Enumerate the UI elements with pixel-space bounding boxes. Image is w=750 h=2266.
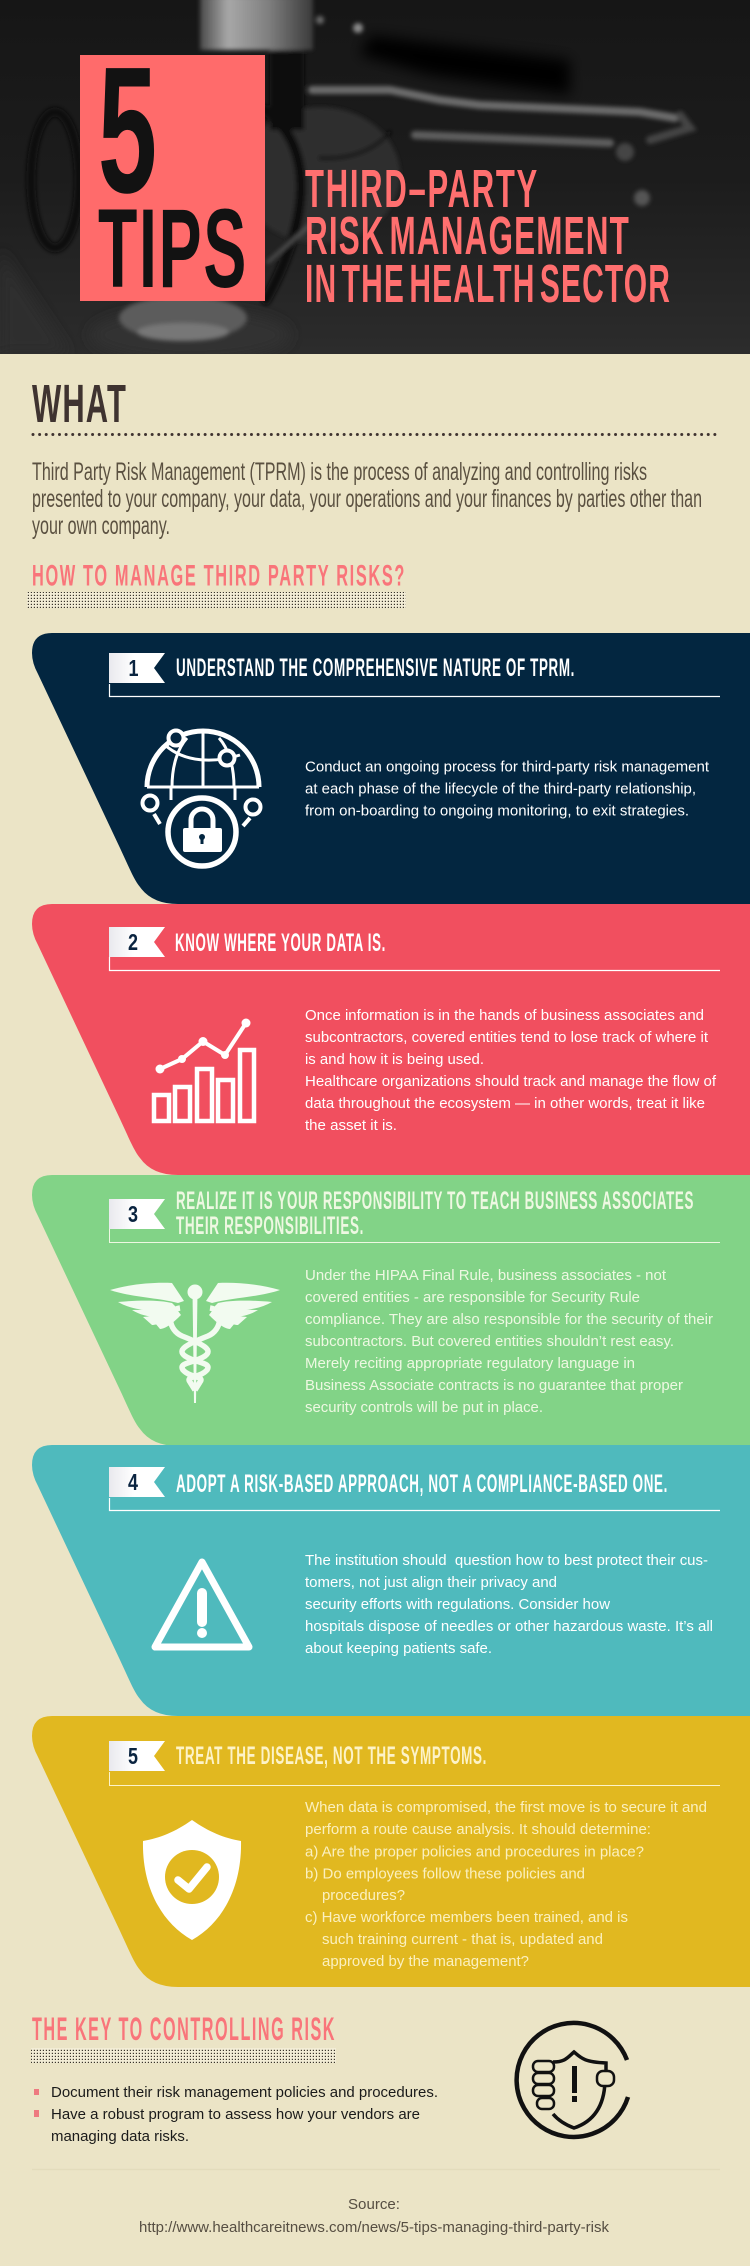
icon: warning triangle [155, 1562, 249, 1647]
panel 2 [32, 904, 750, 1175]
panel 3 body text [305, 1267, 713, 1416]
panel 5 [32, 1716, 750, 1987]
icon: globe with padlock [142, 730, 260, 866]
panel 4 flag [109, 1467, 165, 1497]
panel 5 flag: 5 [128, 1743, 138, 1769]
icon: caduceus [110, 1283, 280, 1403]
key points list: Have a robust program to assess how your vendors are [51, 2106, 420, 2123]
panel 5 body text: such training current - that is, updated and [322, 1931, 603, 1948]
icon: bar chart with trend line [154, 1018, 254, 1121]
panel 3 title [176, 1187, 694, 1240]
panel 2 body text: the asset it is. [305, 1117, 397, 1134]
panel 5 body text: approved by the management? [322, 1953, 529, 1970]
panel 1 flag [109, 653, 165, 683]
panel 3 body text: compliance. They are also responsible for the security of their [305, 1311, 713, 1328]
panel 2 body text: Healthcare organizations should track and manage the flow of [305, 1073, 717, 1090]
panel 4 body text: The institution should question how to best protect their cus- [305, 1552, 708, 1569]
heading: the key to controlling risk [31, 2011, 336, 2063]
panel 2 flag: 2 [128, 929, 138, 955]
panel 5 body text: procedures? [322, 1887, 405, 1904]
heading: how to manage: HOW TO MANAGE THIRD PARTY RISKS? [32, 560, 406, 592]
panel 2 body text: Once information is in the hands of business associates and [305, 1007, 704, 1024]
panel 1 [32, 633, 750, 904]
panel 3 flag: 3 [128, 1201, 138, 1227]
panel 4 [32, 1445, 750, 1716]
panel 4 body text: hospitals dispose of needles or other hazardous waste. It’s all [305, 1618, 713, 1635]
panel 3 flag [109, 1199, 165, 1229]
panel 3 title: THEIR RESPONSIBILITIES. [176, 1212, 364, 1240]
key points list [34, 2084, 438, 2145]
heading: how to manage [27, 560, 406, 608]
hero pink box with 5 TIPS: TIPS [98, 186, 248, 311]
hero pink box with 5 TIPS: 5 [98, 30, 157, 231]
panel 2 body text: is and how it is being used. [305, 1051, 484, 1068]
hero title: THIRD–PARTY [305, 159, 539, 219]
heading: the key to controlling risk: THE KEY TO CONTROLLING RISK [32, 2011, 336, 2047]
source text [139, 2196, 609, 2236]
panel 5 body text: b) Do employees follow these policies and [305, 1866, 585, 1882]
panel 4 body text: tomers, not just align their privacy and [305, 1574, 557, 1591]
dotted divider [33, 433, 716, 436]
panel 2 flag [109, 927, 165, 957]
hero title [305, 159, 671, 314]
hero photo: stethoscope [0, 0, 750, 361]
panel 4 flag: 4 [128, 1469, 138, 1495]
panel 5 body text: When data is compromised, the first move is to secure it and [305, 1799, 707, 1816]
panel 4 body text: about keeping patients safe. [305, 1640, 492, 1657]
intro paragraph [32, 458, 702, 540]
source text: Source: [348, 2196, 400, 2213]
panel 2 body text [305, 1007, 717, 1134]
panel 3 [32, 1175, 750, 1446]
panel 3 body text: Under the HIPAA Final Rule, business associates - not [305, 1267, 667, 1284]
panel 1 body text: Conduct an ongoing process for third-party risk management [305, 758, 710, 776]
panel 5 body text: perform a route cause analysis. It should determine: [305, 1821, 651, 1838]
icon: shield with check [143, 1820, 241, 1940]
intro paragraph: your own company. [32, 512, 170, 540]
panel 1 flag: 1 [128, 655, 139, 681]
panel 5 body text [305, 1799, 707, 1970]
heading: WHAT: WHAT [32, 374, 127, 434]
panel 1 body text: from on-boarding to ongoing monitoring, to exit strategies. [305, 802, 689, 820]
panel 5 flag [109, 1741, 165, 1771]
icon: hand holding shield with exclamation [517, 2023, 628, 2137]
panel 5 body text: a) Are the proper policies and procedures in place? [305, 1844, 644, 1860]
panel 3 body text: security controls will be put in place. [305, 1399, 543, 1416]
panel 2 body text: subcontractors, covered entities tend to lose track of where it [305, 1029, 709, 1046]
panel 1 body text [305, 758, 710, 820]
panel 1 body text: at each phase of the lifecycle of the third-party relationship, [305, 780, 696, 798]
panel 3 body text: covered entities - are responsible for Security Rule [305, 1289, 640, 1306]
panel 4 body text [305, 1552, 713, 1657]
panel 2 body text: data throughout the ecosystem — in other words, treat it like [305, 1095, 705, 1112]
source text: http://www.healthcareitnews.com/news/5-tips-managing-third-party-risk [139, 2219, 609, 2236]
panel 5 title: TREAT THE DISEASE, NOT THE SYMPTOMS. [176, 1742, 487, 1770]
key points list: managing data risks. [51, 2128, 189, 2145]
hero pink box with 5 TIPS [80, 30, 265, 311]
panel 2 title: KNOW WHERE YOUR DATA IS. [175, 929, 386, 957]
panel 5 body text: c) Have workforce members been trained, and is [305, 1909, 628, 1926]
panel 3 body text: Merely reciting appropriate regulatory language in [305, 1355, 635, 1372]
panel 3 body text: Business Associate contracts is no guarantee that proper [305, 1377, 683, 1394]
key points list: Document their risk management policies and procedures. [51, 2084, 438, 2101]
panel 4 body text: security efforts with regulations. Consider how [305, 1596, 610, 1613]
panel 3 body text: subcontractors. But covered entities shouldn’t rest easy. [305, 1333, 674, 1350]
